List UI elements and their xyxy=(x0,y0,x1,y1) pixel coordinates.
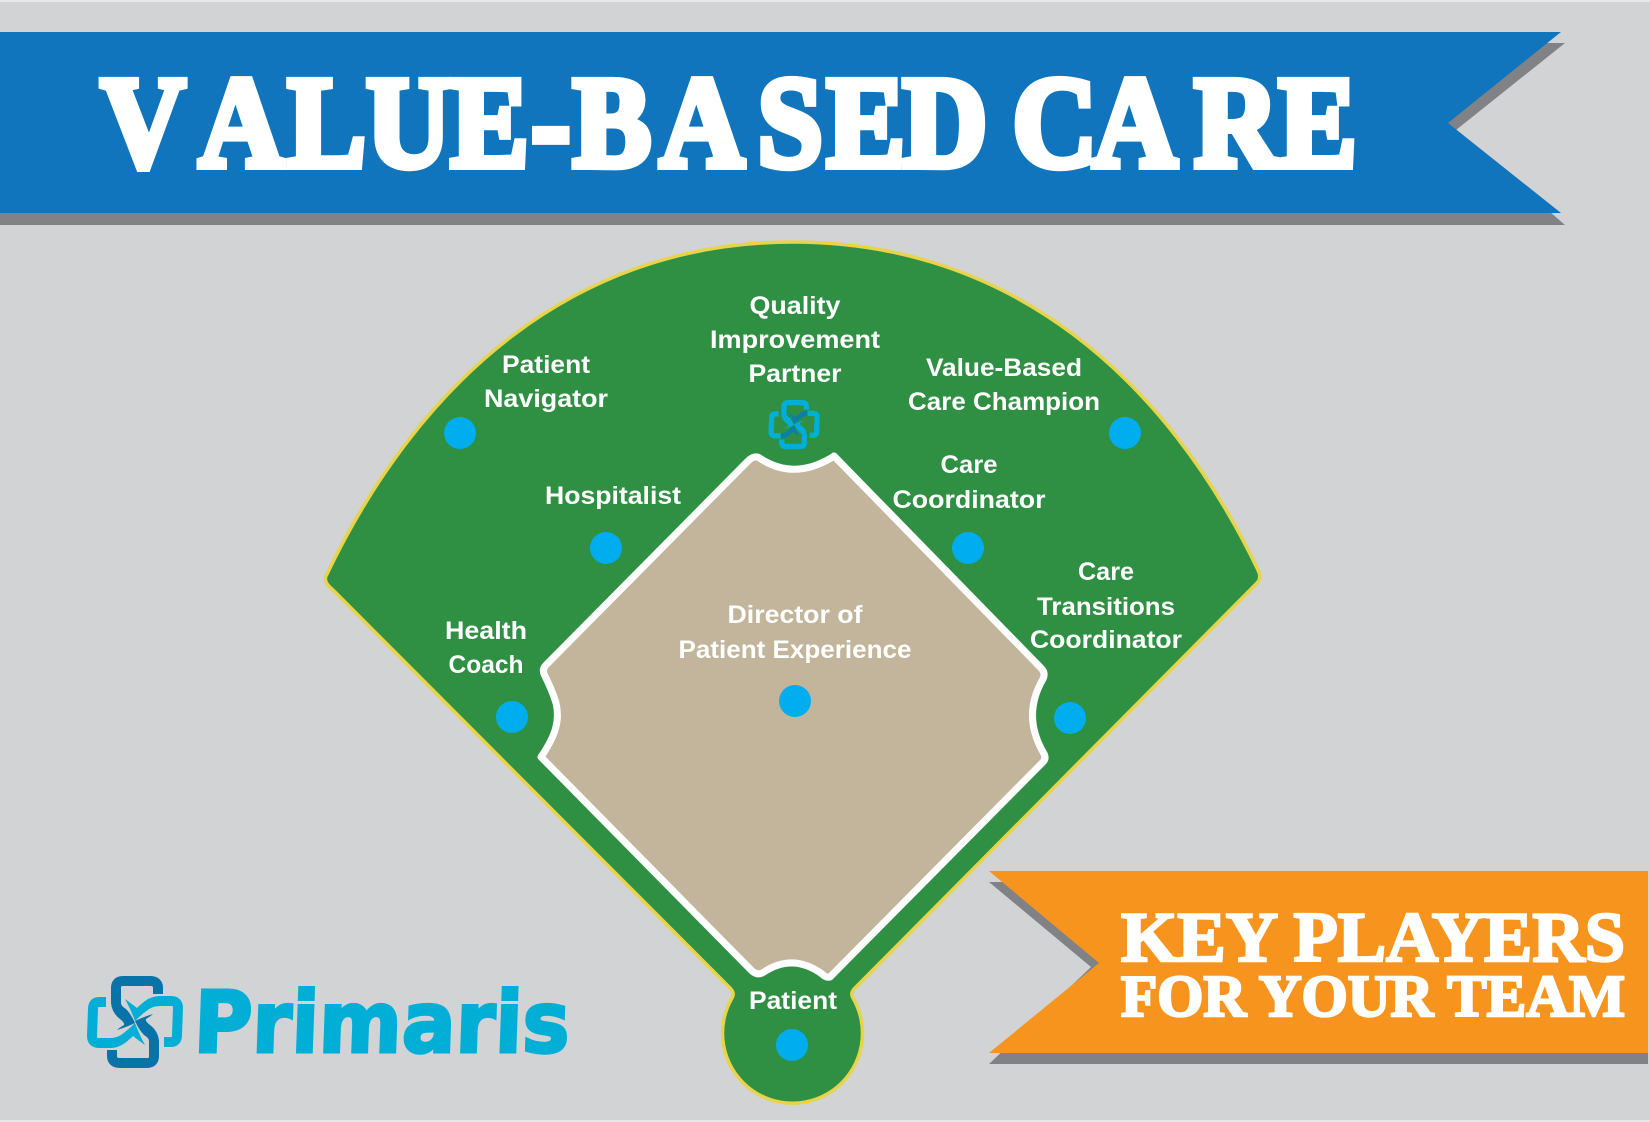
label: Patient Navigator: Navigator xyxy=(484,385,608,413)
label: Care Coordinator: Care xyxy=(940,451,998,479)
wordmark: Primaris xyxy=(192,974,572,1073)
label: Health Coach xyxy=(445,617,527,679)
label: Quality Improvement Partner xyxy=(710,292,881,388)
player markers xyxy=(444,417,1141,1061)
label: Quality Improvement Partner: Partner xyxy=(748,360,842,388)
icon: small Primaris cross on field xyxy=(771,403,817,447)
label: Director of Patient Experience xyxy=(678,601,912,664)
label: Hospitalist: Hospitalist xyxy=(545,482,682,510)
label: Care Transitions Coordinator: Care xyxy=(1078,558,1134,586)
label: Quality Improvement Partner: Improvement xyxy=(710,326,881,354)
label: Care Coordinator: Coordinator xyxy=(892,486,1046,514)
label: Care Transitions Coordinator xyxy=(1030,558,1182,654)
label: Care Transitions Coordinator: Coordinator xyxy=(1030,626,1182,654)
label: Value-Based Care Champion xyxy=(908,354,1100,416)
label: Value-Based Care Champion: Care Champion xyxy=(908,388,1100,416)
label: Patient: Patient xyxy=(749,987,838,1015)
label: Health Coach: Coach xyxy=(448,651,524,679)
label: Director of Patient Experience: Director of xyxy=(728,601,863,629)
label: Patient Navigator: Patient xyxy=(502,351,591,379)
icon: Primaris cross xyxy=(92,981,178,1063)
label: Director of Patient Experience: Patient Experience xyxy=(678,636,912,664)
ribbon text: KEY PLAYERS xyxy=(1121,899,1625,977)
ribbon text: FOR YOUR TEAM xyxy=(1121,963,1625,1029)
key players ribbon xyxy=(989,871,1648,1064)
label: Care Transitions Coordinator: Transitions xyxy=(1037,593,1175,621)
label: Value-Based Care Champion: Value-Based xyxy=(926,354,1082,382)
title: VALUE-BASED CARE xyxy=(101,50,1357,194)
ribbon text xyxy=(1121,899,1625,1029)
infield diamond xyxy=(541,456,1045,977)
logo: Primaris xyxy=(92,974,572,1073)
label: Quality Improvement Partner: Quality xyxy=(750,292,841,320)
label: Patient Navigator xyxy=(484,351,608,413)
label: Health Coach: Health xyxy=(445,617,527,645)
label: Care Coordinator xyxy=(892,451,1046,514)
baseball field outfield xyxy=(325,242,1260,1103)
title ribbon xyxy=(0,32,1565,225)
